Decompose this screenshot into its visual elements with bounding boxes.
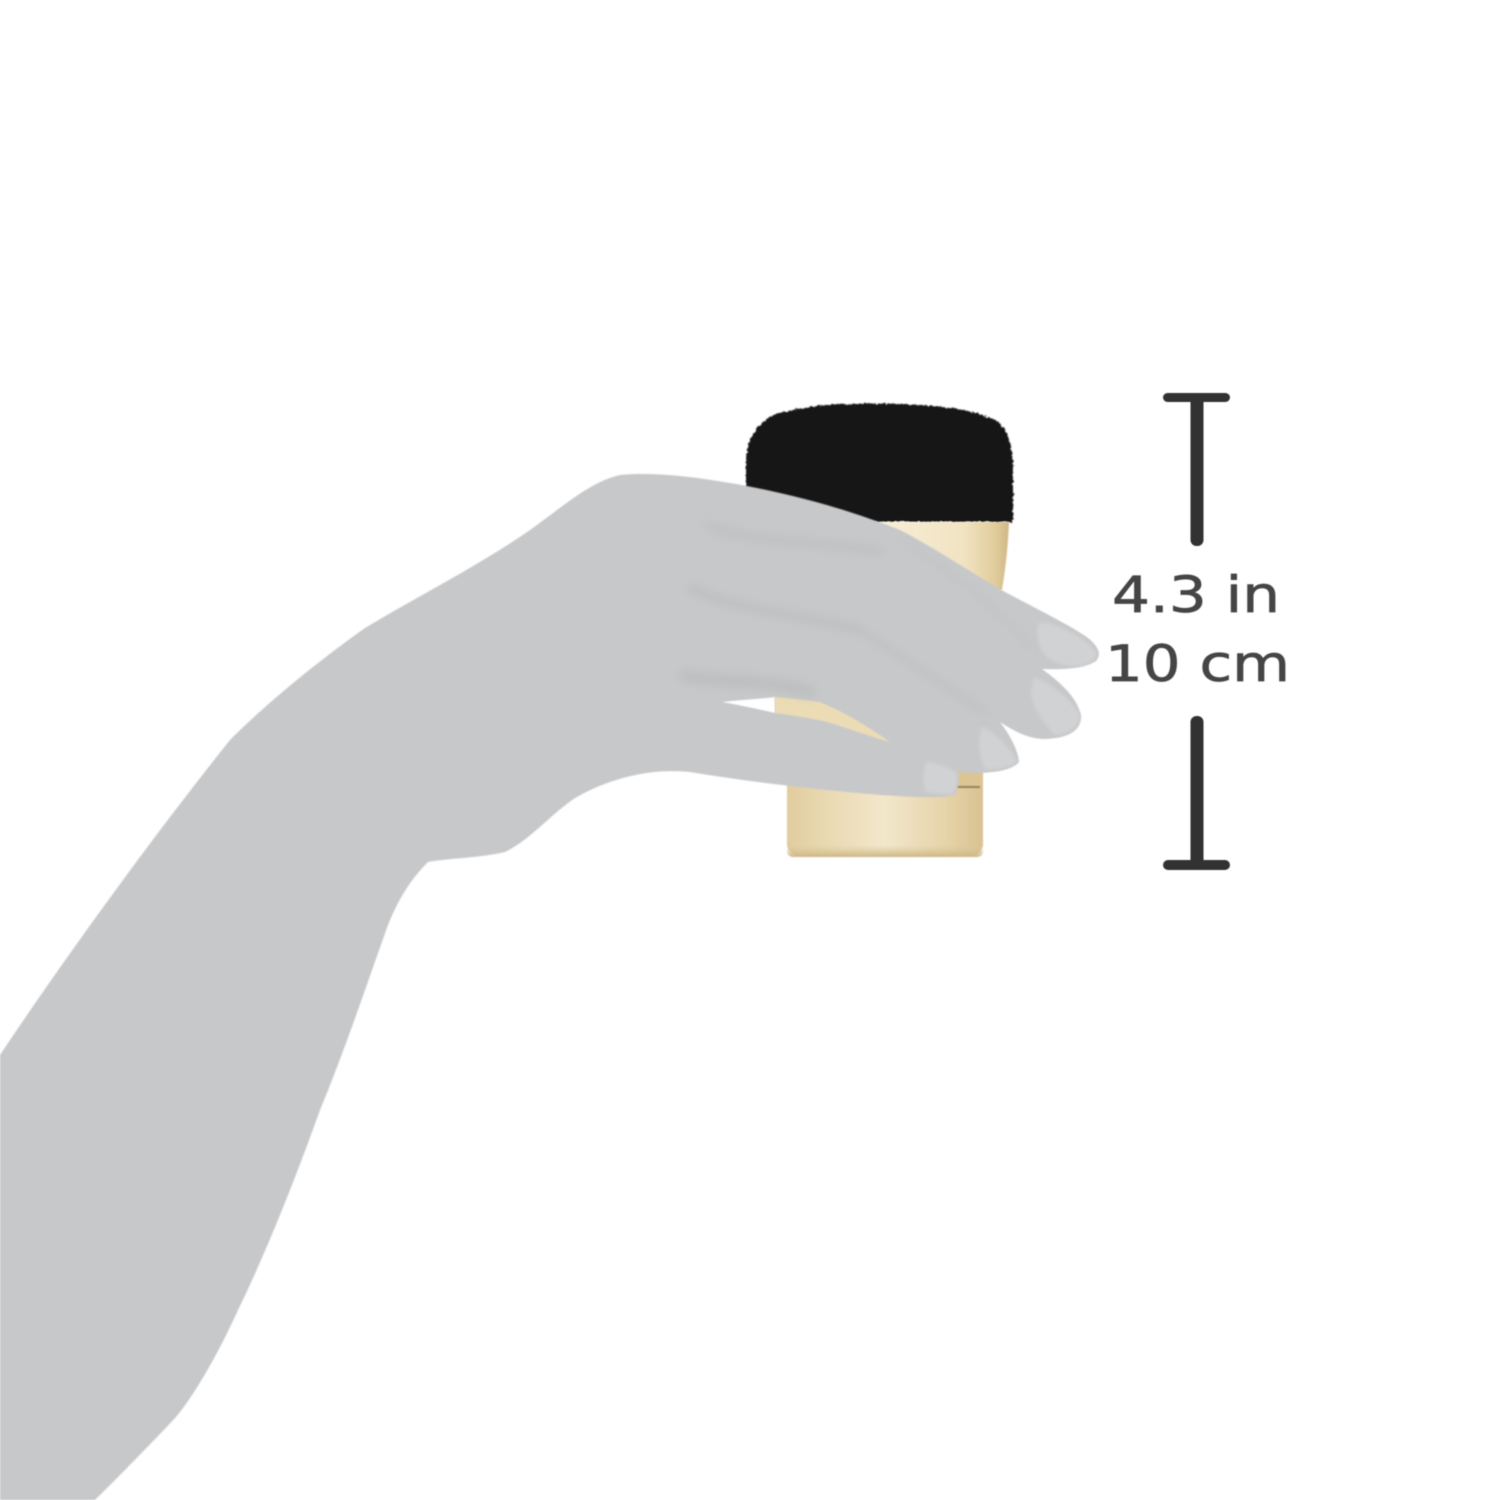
product: brush xyxy=(746,404,1013,857)
nail: middle finger xyxy=(1031,677,1080,735)
gap between thumb and fingers xyxy=(722,697,775,713)
upper collar behind fingers xyxy=(955,760,982,787)
finger crease shading xyxy=(685,526,1035,712)
measurement: height dimension xyxy=(1105,393,1290,870)
nail: ring finger xyxy=(979,727,1017,769)
nail: index finger xyxy=(1037,622,1096,666)
visible handle between thumb and fingers xyxy=(775,697,890,742)
brush bristles xyxy=(746,404,1013,522)
finger nails xyxy=(923,622,1096,794)
top bracket xyxy=(1163,393,1230,546)
brush base xyxy=(787,760,983,857)
centimetres text: 10 cm xyxy=(1105,635,1290,693)
size label xyxy=(1105,566,1290,693)
nail: little finger xyxy=(923,762,957,794)
hand and arm silhouette xyxy=(0,474,1099,1500)
inches text: 4.3 in xyxy=(1112,566,1280,624)
arm and hand shape xyxy=(0,474,1099,1500)
brush upper handle xyxy=(880,522,1009,590)
bottom bracket xyxy=(1163,716,1230,870)
base seam line xyxy=(955,786,980,788)
brush middle handle xyxy=(775,697,890,742)
